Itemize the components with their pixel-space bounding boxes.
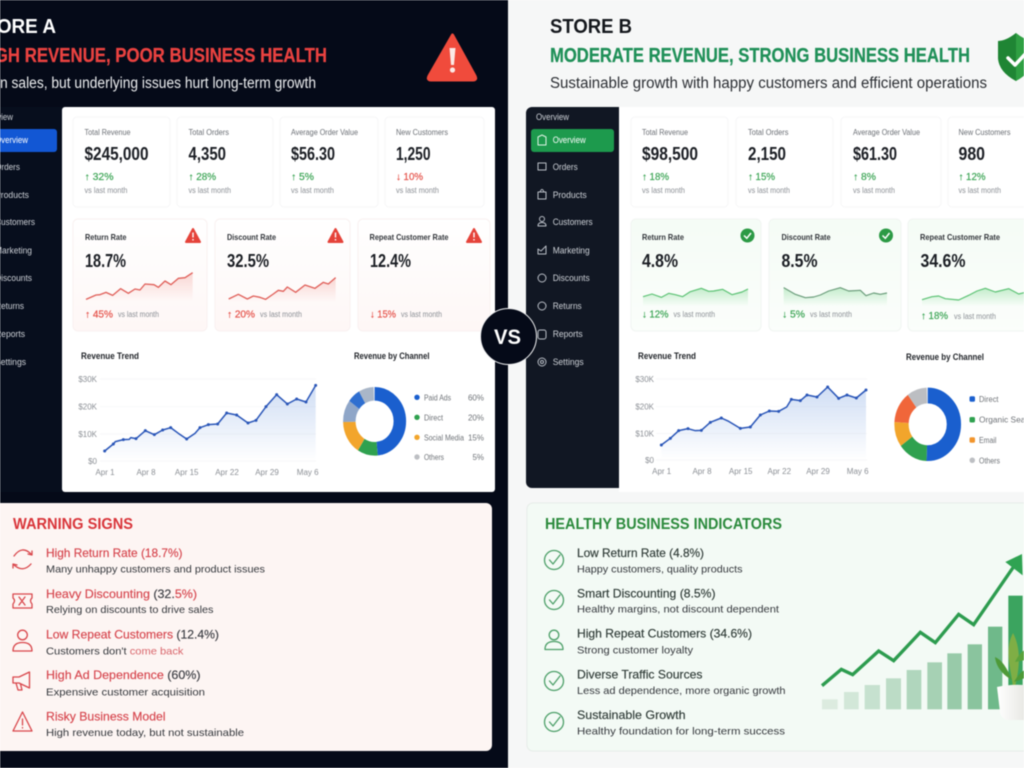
indicator: diverse traffic sources (544, 668, 786, 697)
alert: return rate: 18.7% (85, 251, 126, 271)
alert: discount rate (227, 229, 342, 320)
alert: return rate: ↑ 45% (85, 310, 113, 320)
alert: repeat customer rate: ↓ 15% (370, 310, 396, 320)
chart: store B revenue trend: Apr 29 (806, 467, 830, 476)
KPI: new customers: New Customers (396, 128, 448, 137)
legend: 5% (472, 453, 484, 462)
KPI: new customers: ↓ 10% (396, 172, 423, 183)
KPI: new customers: ↑ 12% (958, 172, 986, 183)
warning item: low repeat customers: Low Repeat Customers (12.4%) (46, 628, 219, 642)
KPI: average order value: ↑ 8% (853, 172, 876, 183)
store A KPI cards (73, 117, 484, 207)
chart: store B revenue trend: Apr 22 (768, 467, 792, 476)
nav labels: Reports (553, 329, 583, 340)
alert: repeat customer rate: vs last month (401, 310, 442, 319)
active nav item (0, 129, 57, 152)
store B KPI cards (631, 117, 1024, 207)
heading: warning signs: WARNING SIGNS (13, 516, 133, 533)
warning item: high ad dependence: High Ad Dependence (60%) (46, 668, 200, 682)
nav labels: Discounts (553, 273, 590, 284)
indicator: low return rate: Low Return Rate (4.8%) (577, 546, 704, 560)
health: discount rate: vs last month (810, 310, 852, 319)
chart: store A revenue trend: Apr 22 (215, 468, 239, 477)
KPI: total orders: Total Orders (748, 128, 788, 137)
badge: VS: VS (494, 326, 521, 349)
title: store B: STORE B (550, 16, 632, 38)
chart: store B revenue by channel donut: Revenue by Channel (906, 352, 984, 362)
chart: store B revenue trend: Apr 1 (652, 467, 672, 476)
KPI: total orders: Total Orders (188, 128, 229, 137)
KPI: total revenue: ↑ 32% (84, 172, 114, 183)
panel: store B background (508, 0, 1024, 768)
nav labels: Marketing (553, 246, 590, 256)
KPI: average order value (291, 128, 358, 195)
nav labels (0, 112, 35, 368)
chart: store A revenue trend: $0 (88, 457, 98, 466)
KPI: total orders: 4,350 (188, 144, 226, 164)
health: return rate (642, 228, 754, 320)
warning item: risky business model: High revenue today, but not sustainable (46, 727, 244, 739)
KPI: average order value: vs last month (291, 186, 334, 195)
nav labels: Settings (553, 357, 584, 368)
chart: store B revenue trend (635, 351, 869, 476)
chart: store B revenue trend: $30K (635, 375, 655, 384)
KPI: average order value: Average Order Value (291, 128, 358, 137)
alert: return rate: Return Rate (85, 232, 127, 242)
panel: store B sidebar (526, 107, 626, 488)
chart: store A revenue trend: $30K (78, 375, 98, 384)
panel: store A sidebar (0, 107, 62, 492)
indicator: high repeat customers: High Repeat Customers (34.6%) (577, 626, 752, 640)
alert: repeat customer rate: Repeat Customer Rate (370, 232, 449, 242)
panel: store A dashboard (62, 107, 495, 492)
plant in white pot (995, 633, 1024, 720)
nav labels (536, 112, 593, 368)
nav labels: Customers (553, 217, 593, 228)
KPI: average order value (853, 128, 920, 195)
legend: Paid Ads (424, 393, 451, 402)
warning item: low repeat customers: Customers don't come back (46, 646, 184, 658)
chart: store B revenue trend: $0 (645, 456, 655, 465)
nav icons (538, 135, 546, 366)
chart: store B revenue trend: Apr 8 (692, 467, 712, 476)
legend: 60% (468, 393, 484, 402)
indicator: diverse traffic sources: Diverse Traffic Sources (577, 668, 702, 682)
legend (414, 393, 484, 462)
KPI: total revenue: ↑ 18% (642, 172, 669, 183)
legend: Direct (424, 413, 444, 422)
KPI: total revenue: $98,500 (642, 144, 698, 164)
KPI: new customers: 980 (958, 144, 985, 164)
KPI: new customers: New Customers (958, 128, 1010, 137)
KPI: new customers: vs last month (958, 186, 1001, 195)
indicator: diverse traffic sources: Less ad dependence, more organic growth (577, 685, 786, 697)
KPI: total orders: ↑ 15% (748, 172, 775, 183)
warning item: heavy discounting: Heavy Discounting (32.5%) (46, 587, 197, 601)
heading: healthy business indicators: HEALTHY BUSINESS INDICATORS (545, 516, 782, 533)
icon: shield check (998, 33, 1024, 81)
indicator: sustainable growth: Healthy foundation for long-term success (577, 726, 785, 738)
panel: healthy business indicators (527, 503, 1024, 751)
chart: store B revenue trend: $20K (635, 402, 655, 412)
illustration: growth chart with arrow and plant (822, 554, 1024, 720)
health: discount rate: 8.5% (782, 251, 818, 271)
store A header (0, 16, 476, 92)
indicator: low return rate (544, 546, 742, 576)
health: repeat customer rate: vs last month (954, 312, 996, 321)
health: repeat customer rate (920, 232, 1024, 322)
indicator: sustainable growth: Sustainable Growth (577, 708, 686, 722)
legend: Direct (979, 395, 999, 404)
nav labels: Orders (553, 162, 578, 173)
nav labels: Returns (553, 301, 582, 312)
chart: store A revenue trend: Revenue Trend (81, 351, 139, 361)
warning item: high ad dependence (13, 668, 205, 698)
legend: Email (979, 436, 997, 445)
KPI: total orders: ↑ 28% (188, 172, 216, 183)
health: discount rate: Discount Rate (782, 232, 831, 242)
KPI: new customers: 1,250 (396, 144, 430, 164)
chart: store A revenue trend (78, 351, 319, 477)
health: repeat customer rate: ↑ 18% (921, 311, 948, 322)
KPI: total revenue (642, 128, 698, 195)
warning item: heavy discounting (13, 587, 214, 616)
icon: warning triangle (428, 35, 476, 80)
KPI: average order value: vs last month (853, 186, 895, 195)
indicator: high repeat customers (545, 626, 752, 656)
health: return rate: 4.8% (642, 251, 678, 271)
warning item: high return rate: Many unhappy customers and product issues (46, 564, 265, 576)
alert: discount rate: vs last month (260, 310, 302, 319)
warning item: high ad dependence: Expensive customer acquisition (46, 686, 205, 698)
chart: store A revenue trend: Apr 29 (255, 468, 279, 477)
store B header (550, 16, 1024, 92)
warning item: risky business model: Risky Business Model (46, 710, 166, 724)
panel: warning signs (0, 503, 492, 751)
alert: repeat customer rate (370, 229, 481, 320)
nav labels: Products (553, 190, 587, 201)
KPI: total orders: vs last month (748, 186, 790, 195)
alert: discount rate: Discount Rate (227, 232, 276, 242)
chart: store B revenue trend: May 6 (847, 467, 869, 476)
chart: store B revenue trend: Revenue Trend (638, 351, 696, 361)
active nav item (531, 129, 614, 152)
chart: store A revenue trend: Apr 15 (175, 468, 199, 477)
chart: store B revenue trend: $10K (635, 430, 655, 438)
health: return rate: Return Rate (642, 232, 684, 242)
KPI: new customers: vs last month (396, 186, 439, 195)
subtitle: Sustainable growth with happy customers and efficient operations (550, 75, 987, 92)
store B health cards (631, 219, 1024, 331)
nav labels: Overview (536, 112, 569, 123)
chart: store A revenue trend: $10K (78, 430, 98, 439)
indicator: low return rate: Happy customers, quality products (577, 564, 742, 576)
warning item: low repeat customers (13, 628, 219, 658)
KPI: total revenue: $245,000 (84, 144, 148, 164)
chart: store B revenue trend: Apr 15 (729, 467, 753, 476)
chart: store A revenue trend: Apr 1 (95, 468, 115, 477)
alert: discount rate: ↑ 20% (227, 310, 255, 320)
warning item: risky business model (13, 710, 244, 739)
KPI: total revenue: vs last month (84, 186, 128, 195)
KPI: total orders (748, 128, 790, 195)
KPI: average order value: Average Order Value (853, 128, 920, 137)
legend (970, 395, 1024, 465)
chart: store A revenue by channel donut (349, 351, 484, 462)
badge: VS (480, 308, 536, 364)
alert: discount rate: 32.5% (227, 251, 269, 271)
health: return rate: ↓ 12% (642, 310, 669, 320)
health: discount rate (782, 228, 893, 320)
legend: Others (979, 456, 1000, 465)
warning item: heavy discounting: Relying on discounts to drive sales (46, 604, 214, 616)
panel: store B dashboard (619, 107, 1024, 492)
KPI: average order value: $56.30 (291, 144, 335, 164)
indicator: high repeat customers: Strong customer loyalty (577, 644, 694, 656)
legend: Social Media (424, 433, 464, 442)
KPI: total revenue: Total Revenue (84, 128, 131, 137)
KPI: total orders (188, 128, 231, 195)
chart: store A revenue by channel donut: Revenue by Channel (354, 351, 430, 361)
subtitle: n sales, but underlying issues hurt long-term growth (0, 75, 316, 92)
KPI: total revenue: vs last month (642, 186, 685, 195)
chart: store A revenue trend: Apr 8 (136, 468, 156, 477)
warning item: high return rate: High Return Rate (18.7%) (46, 546, 182, 560)
nav labels: Overview (553, 135, 586, 146)
legend: Others (424, 453, 444, 462)
KPI: total orders: 2,150 (748, 144, 786, 164)
chart: store A revenue trend: May 6 (297, 468, 319, 477)
legend: 15% (468, 433, 484, 442)
indicator: smart discounting: Smart Discounting (8.5%) (577, 586, 716, 600)
indicator: smart discounting (544, 586, 779, 616)
store A alert cards (73, 219, 490, 331)
panel: store A background (0, 0, 508, 768)
KPI: new customers (396, 128, 448, 195)
alert: return rate (85, 229, 200, 320)
alert: repeat customer rate: 12.4% (370, 251, 411, 271)
warning item: high return rate (13, 546, 265, 576)
KPI: average order value: ↑ 5% (291, 172, 314, 183)
KPI: average order value: $61.30 (853, 144, 897, 164)
health: return rate: vs last month (674, 310, 715, 319)
KPI: total revenue: Total Revenue (642, 128, 688, 137)
KPI: total revenue (84, 128, 148, 195)
health: repeat customer rate: Repeat Customer Rate (920, 232, 1000, 242)
legend: 20% (468, 413, 484, 422)
health: discount rate: ↓ 5% (782, 310, 805, 320)
chart: store B revenue by channel donut (902, 352, 1024, 465)
KPI: total orders: vs last month (188, 186, 231, 195)
KPI: new customers (958, 128, 1010, 195)
alert: return rate: vs last month (118, 310, 159, 319)
chart: store A revenue trend: $20K (78, 402, 98, 412)
indicator: sustainable growth (544, 708, 785, 738)
indicator: smart discounting: Healthy margins, not discount dependent (577, 604, 779, 616)
health: repeat customer rate: 34.6% (920, 251, 966, 271)
